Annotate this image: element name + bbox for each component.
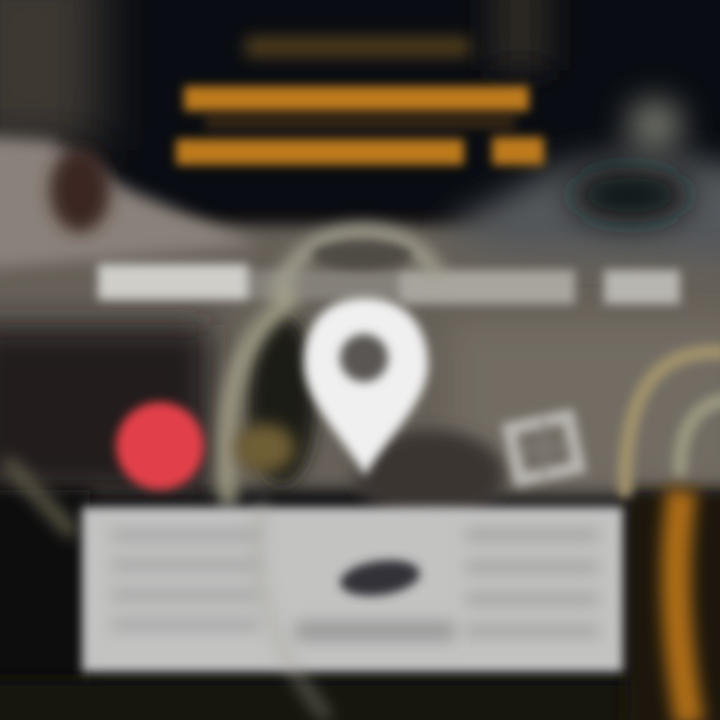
right rope coil	[625, 352, 720, 490]
left column text	[110, 530, 260, 630]
orange title	[176, 86, 544, 165]
red circle icon	[116, 402, 204, 490]
rope arch	[10, 232, 435, 530]
white subtitle band	[98, 264, 680, 304]
decorative moon glow	[627, 99, 683, 151]
right column text	[465, 530, 600, 636]
center bottom text	[295, 622, 455, 640]
eyebrow heading	[245, 37, 470, 57]
orange rope	[676, 490, 690, 720]
gold icon	[235, 424, 295, 472]
panel: information card	[82, 507, 623, 672]
rope over card	[258, 505, 325, 715]
icon: map location pin	[304, 298, 428, 476]
dark shape inside arch	[312, 241, 412, 269]
icon: white gear outline	[509, 416, 579, 480]
dark center badge	[338, 556, 422, 600]
